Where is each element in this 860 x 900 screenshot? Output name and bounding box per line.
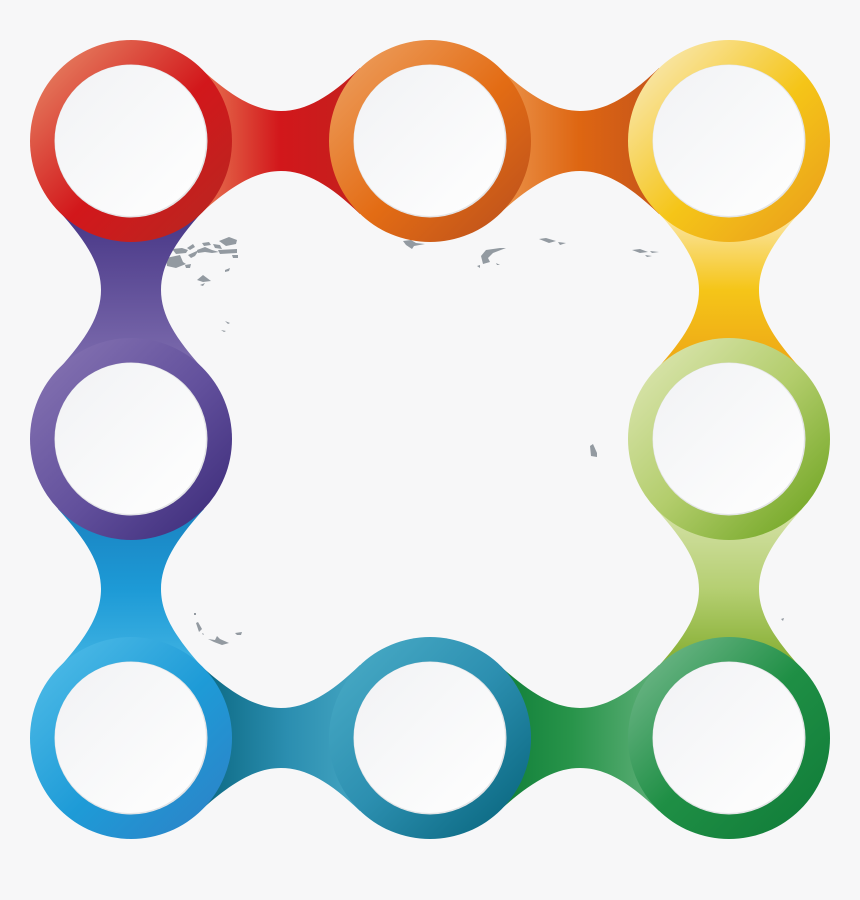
node: light green: [628, 338, 830, 540]
connector: blue to purple: [58, 509, 204, 669]
node: teal: [329, 637, 531, 839]
connector: dark green to teal: [499, 665, 659, 811]
map fragments: [166, 237, 784, 645]
node: blue: [30, 637, 232, 839]
node: orange: [329, 40, 531, 242]
connector: red to orange: [200, 68, 360, 214]
connector: light green to dark green: [656, 509, 802, 669]
connector: purple to red: [58, 210, 204, 370]
connector: teal to blue: [200, 665, 360, 811]
node: purple: [30, 338, 232, 540]
connector: orange to yellow: [499, 68, 659, 214]
connector: yellow to light green: [656, 210, 802, 370]
node: green: [628, 637, 830, 839]
node: red: [30, 40, 232, 242]
node: yellow: [628, 40, 830, 242]
